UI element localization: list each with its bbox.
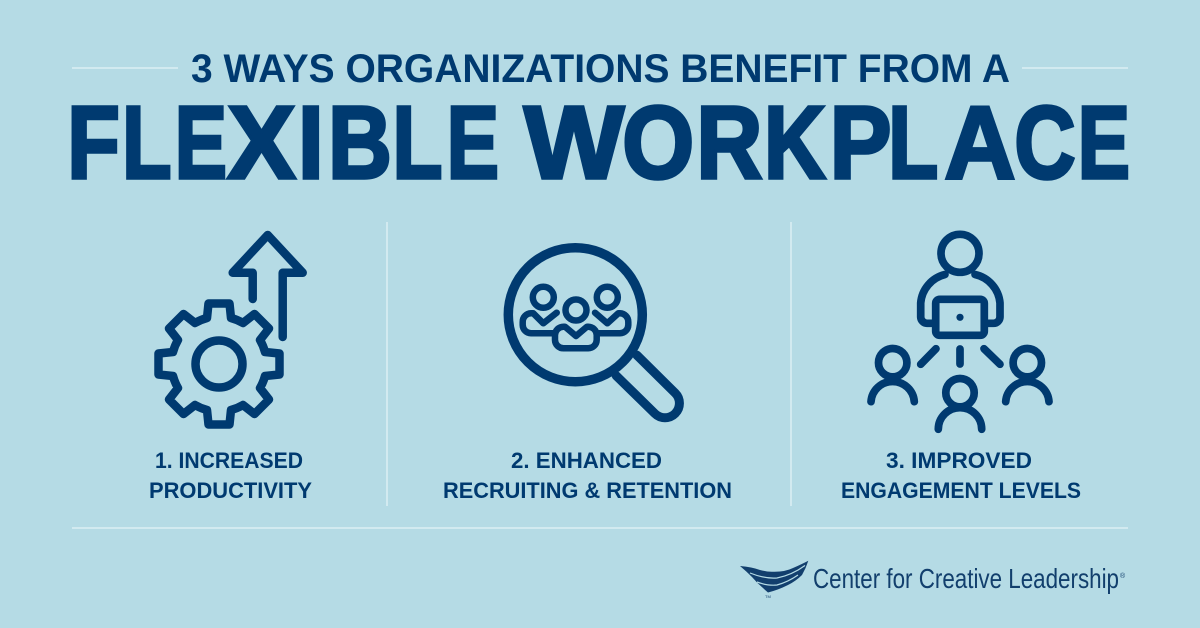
icon: wing mark bbox=[740, 561, 808, 599]
heading: main title: R bbox=[696, 85, 762, 200]
heading: main title: E bbox=[175, 85, 227, 200]
heading: main title: C bbox=[1014, 85, 1076, 200]
heading: main title: O bbox=[622, 85, 694, 200]
label: improved engagement levels bbox=[841, 448, 1081, 503]
icon: gear with up arrow bbox=[158, 235, 303, 424]
heading: main title: L bbox=[122, 85, 172, 200]
label: increased productivity: 1. INCREASED bbox=[155, 448, 303, 473]
label: improved engagement levels: 3. IMPROVED bbox=[886, 448, 1032, 473]
heading: main title: F bbox=[67, 85, 120, 200]
heading: main title: L bbox=[392, 85, 442, 200]
label: increased productivity bbox=[149, 448, 312, 503]
icon: wing mark: TM bbox=[765, 594, 771, 599]
panel: enhanced recruiting and retention bbox=[443, 248, 732, 503]
heading: main title: P bbox=[830, 85, 891, 200]
heading: main title: K bbox=[764, 85, 826, 200]
heading: main title: E bbox=[1078, 85, 1130, 200]
panel: increased productivity bbox=[149, 235, 312, 503]
wordmark: Center for Creative Leadership bbox=[813, 563, 1119, 594]
logo: Center for Creative Leadership bbox=[740, 561, 1126, 599]
registered mark: ® bbox=[1120, 572, 1126, 580]
label: improved engagement levels: ENGAGEMENT LEVELS bbox=[841, 478, 1081, 503]
heading: main title: A bbox=[944, 85, 1015, 200]
icon: magnifier over people bbox=[508, 248, 679, 418]
panel: improved engagement levels bbox=[841, 234, 1081, 503]
label: increased productivity: PRODUCTIVITY bbox=[149, 478, 312, 503]
heading: main title: E bbox=[447, 85, 499, 200]
heading: main title: W bbox=[524, 85, 625, 200]
heading: main title: X bbox=[228, 85, 296, 200]
heading: main title: B bbox=[328, 85, 392, 200]
heading: main title: L bbox=[888, 85, 938, 200]
label: enhanced recruiting and retention bbox=[443, 448, 732, 503]
label: enhanced recruiting and retention: RECRUITING & RETENTION bbox=[443, 478, 732, 503]
icon: remote leader with team bbox=[871, 234, 1049, 429]
label: enhanced recruiting and retention: 2. ENHANCED bbox=[511, 448, 662, 473]
heading: main title: I bbox=[298, 85, 324, 200]
heading: subtitle: 3 WAYS ORGANIZATIONS BENEFIT FROM A bbox=[191, 47, 1010, 91]
